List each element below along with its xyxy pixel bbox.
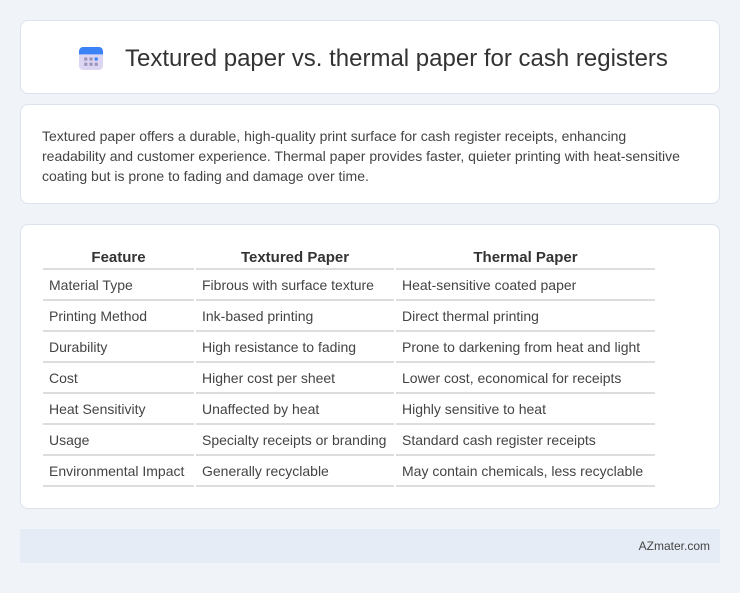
comparison table: Heat-sensitive coated paper bbox=[402, 276, 576, 292]
comparison table: Feature bbox=[91, 248, 146, 266]
comparison table: Direct thermal printing bbox=[402, 308, 539, 324]
description text: Textured paper offers a durable, high-quality print surface for cash register receipts, enhancing readability and customer experience. Thermal paper provides faster, quieter printing with heat-sensitive coating but is prone to fading and damage over time. bbox=[42, 128, 680, 184]
comparison table: Heat Sensitivity bbox=[49, 400, 145, 416]
comparison table: Textured Paper bbox=[241, 248, 349, 266]
comparison table: May contain chemicals, less recyclable bbox=[402, 462, 643, 478]
comparison table: Unaffected by heat bbox=[202, 400, 319, 416]
comparison table: Environmental Impact bbox=[49, 462, 184, 478]
comparison table: Material Type bbox=[49, 276, 133, 292]
comparison table: Highly sensitive to heat bbox=[402, 400, 546, 416]
footer brand: AZmater.com bbox=[639, 539, 710, 553]
comparison table: Thermal Paper bbox=[473, 248, 578, 266]
comparison table: High resistance to fading bbox=[202, 338, 356, 354]
title: Textured paper vs. thermal paper for cash registers bbox=[125, 45, 668, 72]
comparison table: Printing Method bbox=[49, 308, 147, 324]
comparison table: Standard cash register receipts bbox=[402, 432, 596, 448]
description card bbox=[20, 104, 720, 204]
comparison table: Higher cost per sheet bbox=[202, 370, 335, 386]
comparison table: Fibrous with surface texture bbox=[202, 276, 374, 292]
comparison table: Cost bbox=[49, 370, 78, 386]
footer bbox=[20, 529, 720, 563]
comparison table: Durability bbox=[49, 338, 107, 354]
comparison table bbox=[43, 248, 655, 487]
comparison table: Specialty receipts or branding bbox=[202, 432, 386, 448]
comparison table: Generally recyclable bbox=[202, 462, 329, 478]
table card bbox=[20, 224, 720, 509]
comparison table: Lower cost, economical for receipts bbox=[402, 370, 621, 386]
comparison table: Usage bbox=[49, 432, 89, 448]
comparison table: Prone to darkening from heat and light bbox=[402, 338, 640, 354]
title card bbox=[20, 20, 720, 94]
comparison table: Ink-based printing bbox=[202, 308, 313, 324]
icon: calendar bbox=[79, 47, 103, 70]
